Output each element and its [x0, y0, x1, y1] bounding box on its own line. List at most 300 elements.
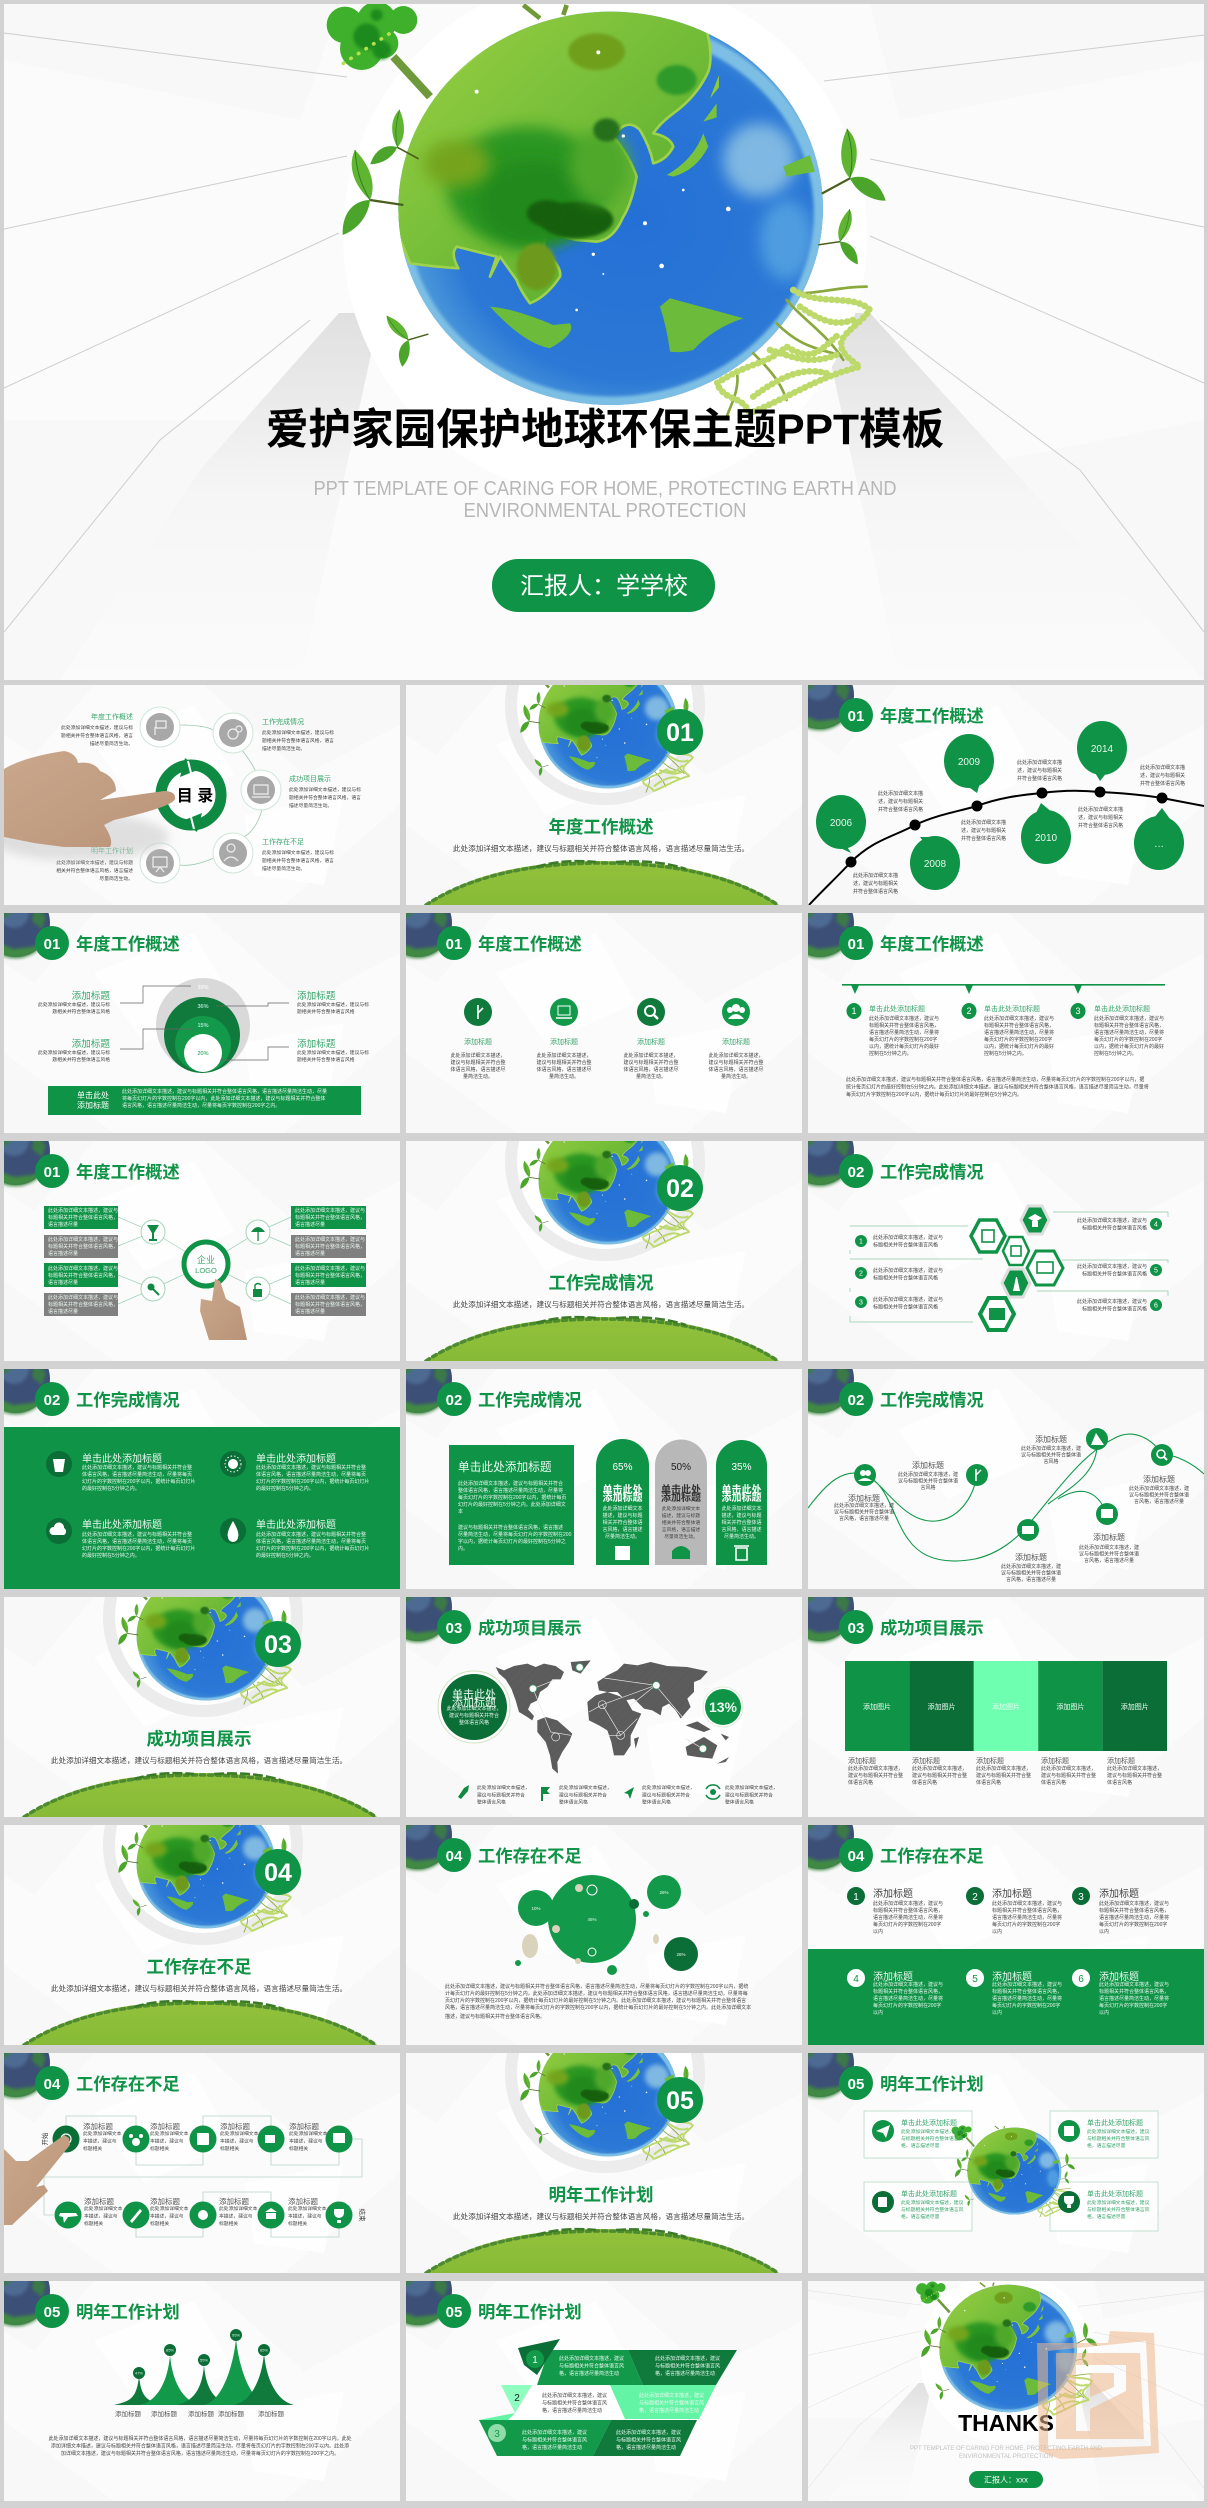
header: [786, 889, 984, 960]
13% badge: 13%: [709, 1699, 738, 1715]
right boxes: 此处添加详细文本描述，建议与: [295, 1294, 365, 1301]
card icons: [872, 2120, 1080, 2213]
text card: 每页幻灯片的字数控制在200字以内，据统计每页: [458, 1494, 566, 1501]
node labels: 此处添加详细文本描述，建: [1129, 1485, 1189, 1492]
section description: 此处添加详细文本描述，建议与标题相关并符合整体语言风格，语言描述尽量简洁生活。: [453, 843, 749, 853]
row 2 labels: 本描述，建议与: [219, 2212, 253, 2220]
section title: 明年工作计划: [548, 2185, 654, 2205]
header: 01: [44, 1164, 60, 1181]
ribbon band 1: 此处添加详细文本描述，建议: [655, 2355, 720, 2362]
header: [786, 661, 984, 732]
right list: 此处添加详细文本描述，建议与: [1077, 1298, 1147, 1305]
column captions: 建议与标题相关并符合整: [1107, 1772, 1162, 1779]
ribbon band 2: 格，语言描述尽量简洁生动: [639, 2407, 699, 2414]
hand pointing: [4, 2135, 70, 2225]
card text: 单击此处添加标题: [1087, 2118, 1143, 2127]
text card: 字以内，据统计每页幻灯片的最好控制在5分钟之: [458, 1538, 566, 1545]
row 2 labels: 本描述，建议与: [150, 2212, 184, 2220]
callouts: 添加标题: [297, 990, 336, 1002]
green summary bar: 单击此处: [77, 1090, 109, 1100]
items 4-6: 4: [853, 1974, 859, 1985]
bubbles: [515, 1875, 698, 1975]
bottom legend: 建议与标题相关并符合: [725, 1791, 773, 1798]
column captions: 添加标题: [1041, 1756, 1069, 1765]
row 1 labels: [83, 2121, 328, 2152]
right list: 此处添加详细文本描述，建议与: [1077, 1263, 1147, 1270]
contents text: 题相关并符合整体语言风格，语言: [61, 732, 133, 739]
right boxes: 标题相关并符合整体语言风格，: [295, 1214, 365, 1221]
subtitle: [314, 477, 896, 522]
row 1 labels: 标题相关: [289, 2145, 308, 2152]
panel: folded ribbon list: [406, 2281, 802, 2501]
card text: [901, 2118, 1150, 2220]
columns: 控制在5分钟之内。: [869, 1050, 912, 1057]
contents text: 描述尽量简洁生动。: [289, 802, 332, 809]
left boxes: 语言描述尽量: [48, 1221, 78, 1228]
right list: 4: [1154, 1222, 1158, 1228]
columns: 以内，据统计每页幻灯片的最好: [984, 1043, 1054, 1050]
column captions: 体语言风格: [848, 1779, 873, 1786]
node labels: 添加标题: [912, 1460, 944, 1470]
items 1-3: 语言描述尽量简洁生动，尽量将: [873, 1914, 943, 1921]
header: 02: [848, 1392, 864, 1409]
year bubbles: …: [1154, 839, 1164, 850]
illustration: earth: [916, 2282, 1097, 2416]
bottom legend: 建议与标题相关并符合: [559, 1791, 607, 1798]
node labels: 此处添加详细文本描述，建: [1001, 1563, 1061, 1570]
column captions: 添加标题: [848, 1756, 876, 1765]
header: [0, 2029, 180, 2100]
panel: section 01 divider: [406, 685, 802, 905]
right boxes: 语言描述尽量: [295, 1308, 325, 1315]
callouts: [38, 990, 369, 1063]
hand pointing: [0, 751, 175, 861]
section title: 年度工作概述: [548, 817, 654, 837]
panel: green band with four items: [4, 1369, 400, 1589]
green summary bar: 此处添加详细文本描述，建议与标题相关并符合整体语言风格，语言描述尽量简洁生动，尽量: [122, 1088, 327, 1095]
row 1 labels: 标题相关: [83, 2145, 102, 2152]
column text: 建议与标题相关并符合整: [450, 1059, 506, 1066]
column captions: 添加标题: [1107, 1756, 1135, 1765]
item text: 体语言风格，语言描述尽量简洁生动，尽量将每页: [256, 1471, 366, 1478]
contents text: 描述尽量简洁生动。: [90, 740, 133, 747]
left boxes: 标题相关并符合整体语言风格，: [48, 1272, 118, 1279]
columns: 此处添加详细文本描述，建议与: [984, 1015, 1054, 1022]
hand pointing up: [200, 1279, 247, 1340]
column captions: 建议与标题相关并符合整: [976, 1772, 1031, 1779]
contents text: 明年工作计划: [91, 846, 133, 855]
column captions: 此处添加详细文本描述，: [1107, 1765, 1162, 1772]
header: [384, 1573, 582, 1644]
items 4-6: 标题相关并符合整体语言风格，: [1099, 1988, 1169, 1995]
node labels: 添加标题: [1015, 1552, 1047, 1562]
column text: 此处添加详细文本描述，: [536, 1052, 592, 1059]
contents nodes: [140, 707, 281, 883]
items 1-3: 每页幻灯片的字数控制在200字: [992, 1921, 1060, 1928]
subtitle: ENVIRONMENTAL PROTECTION: [959, 2453, 1053, 2460]
arch 65%: 相关并符合整体语: [602, 1519, 643, 1526]
card text: 此处添加详细文本描述，建议: [901, 2128, 964, 2135]
illustration: watercolor earth with trees: [327, 2, 886, 417]
row 1 labels: 添加标题: [83, 2121, 113, 2131]
panel: concentric percent chart: [4, 913, 400, 1133]
green band: [4, 1427, 400, 1589]
node labels: 添加标题: [1035, 1434, 1067, 1444]
card text: 单击此处添加标题: [901, 2118, 957, 2127]
text card: 幻灯片的最好控制在5分钟之内。此处添加详细文: [458, 1501, 566, 1508]
items 4-6: 每页幻灯片的字数控制在200字: [1099, 2002, 1167, 2009]
right boxes: 标题相关并符合整体语言风格，: [295, 1243, 365, 1250]
text card: 此处添加详细文本描述，建议与标题相关并符合: [458, 1480, 563, 1487]
ribbon band 1: 与标题相关并符合整体语言风: [655, 2362, 720, 2370]
columns: 标题相关并符合整体语言风格，: [869, 1022, 939, 1029]
bottom legend: 整体语言风格: [477, 1799, 506, 1806]
column captions: 建议与标题相关并符合整: [1041, 1772, 1096, 1779]
header: [384, 2257, 582, 2328]
panel: three numbered columns: [808, 913, 1204, 1133]
arch 50%: 此处添加详细文本: [662, 1505, 700, 1512]
card text: 格，语言描述尽量: [901, 2213, 940, 2220]
right list: [1037, 1212, 1168, 1312]
left boxes: 此处添加详细文本描述，建议与: [48, 1236, 118, 1243]
section number: 01: [666, 719, 694, 747]
center logo ring: LOGO: [195, 1266, 217, 1275]
right boxes: 语言描述尽量: [295, 1221, 325, 1228]
card outlines: [864, 2111, 1158, 2231]
card text: 单击此处添加标题: [1087, 2189, 1143, 2198]
green summary bar: [48, 1086, 361, 1115]
arch 35%: 单击此处: [722, 1483, 762, 1496]
columns: 语言描述尽量简洁生动，尽量将: [1094, 1029, 1164, 1036]
arch 35%: 添加标题: [722, 1491, 762, 1504]
columns: 每页幻灯片的字数控制在200字: [1094, 1036, 1162, 1043]
contents text: 此处添加详细文本描述，建议与标: [61, 724, 133, 731]
card text: 格，语言描述尽量: [1087, 2142, 1126, 2149]
left list: 标题相关并符合整体语言风格: [873, 1242, 938, 1248]
subtitle: PPT TEMPLATE OF CARING FOR HOME, PROTECTING EARTH AND: [910, 2445, 1102, 2452]
items 4-6: 6: [1078, 1974, 1084, 1985]
paragraph: 描述，建议与标题相关并符合整体语言风格。: [445, 2013, 545, 2020]
column captions: 添加标题: [912, 1756, 940, 1765]
timeline notes: 述，建议与标题相关: [961, 827, 1006, 834]
color columns: 添加图片: [863, 1702, 891, 1711]
bubbles: 10%: [531, 1906, 541, 1911]
header: 04: [848, 1848, 865, 1865]
section description: 此处添加详细文本描述，建议与标题相关并符合整体语言风格，语言描述尽量简洁生活。: [51, 1983, 347, 1993]
header: [384, 1801, 582, 1872]
row 2 labels: 标题相关: [288, 2220, 307, 2227]
paragraph: 此处添加详细文本描述，建议与标题相关并符合整体语言风格，语言描述尽量简洁生动，尽量将每页幻灯片的字数控制在200字以内，据统: [445, 1983, 748, 1990]
card text: 此处添加详细文本描述，建议: [1087, 2199, 1150, 2206]
mountain peaks: 85%: [260, 2348, 268, 2352]
paragraph: 添加详细文本描述，建议与标题相关并符合整体语言风格，语言描述尽量简洁生动，尽量将每页幻灯片的字数控制在200字以内。此处添: [51, 2442, 349, 2450]
items 1-3: 添加标题: [992, 1887, 1032, 1900]
card text: 与标题相关并符合整体语言风: [901, 2135, 964, 2142]
ribbon band 2: 此处添加详细文本描述，建议: [542, 2392, 607, 2399]
items 1-3: 2: [972, 1892, 978, 1903]
panel: logo mind map: [4, 1141, 400, 1361]
small icon circles: [141, 1220, 270, 1301]
left list: 此处添加详细文本描述，建议与: [873, 1296, 943, 1303]
bottom legend: [458, 1784, 778, 1806]
node labels: 添加标题: [848, 1493, 880, 1503]
node labels: 言风格，语言描述尽量: [1084, 1557, 1134, 1564]
color columns: 添加图片: [928, 1702, 956, 1711]
header: 工作完成情况: [76, 1390, 180, 1410]
row 2 labels: 标题相关: [219, 2220, 238, 2227]
items 1-3: 标题相关并符合整体语言风格，: [873, 1907, 943, 1914]
start and end labels: 结束: [358, 2208, 367, 2222]
subtitle: ENVIRONMENTAL PROTECTION: [464, 499, 746, 522]
items 4-6: 添加标题: [992, 1970, 1032, 1983]
ribbon band 3: 格，语言描述尽量简洁生动: [616, 2444, 676, 2451]
13% badge: [703, 1687, 743, 1727]
columns: 单击此处添加标题: [984, 1004, 1040, 1013]
item text: 体语言风格，语言描述尽量简洁生动，尽量将每页: [82, 1538, 192, 1545]
row 2 labels: 添加标题: [219, 2196, 249, 2206]
header: [786, 1117, 984, 1188]
items 1-3: [847, 1887, 1169, 1935]
header: 年度工作概述: [880, 706, 984, 726]
timeline notes: 并符合整体语言风格: [878, 806, 923, 813]
bottom legend: 此处添加详细文本描述，: [559, 1784, 612, 1791]
header: 年度工作概述: [76, 1162, 180, 1182]
panel: world map: [406, 1597, 802, 1817]
timeline notes: 述，建议与标题相关: [1140, 772, 1185, 779]
column text: 此处添加详细文本描述，: [450, 1052, 506, 1059]
columns: 单击此处添加标题: [869, 1004, 925, 1013]
right list: 此处添加详细文本描述，建议与: [1077, 1217, 1147, 1224]
arch 35%: 35%: [731, 1462, 752, 1473]
thanks title: THANKS: [958, 2410, 1054, 2436]
ribbon band 2: 此处添加详细文本描述，建议: [639, 2392, 704, 2399]
items 1-3: 此处添加详细文本描述，建议与: [873, 1900, 943, 1907]
panel: text box and percent arches: [406, 1369, 802, 1589]
ribbon band 3: 与标题相关并符合整体语言风: [616, 2436, 681, 2444]
left list: 标题相关并符合整体语言风格: [873, 1304, 938, 1310]
arch 50%: 尽量简洁生动。: [664, 1533, 698, 1540]
section description: 此处添加详细文本描述，建议与标题相关并符合整体语言风格，语言描述尽量简洁生活。: [453, 1299, 749, 1309]
column text: 量简洁生动。: [721, 1073, 751, 1080]
section number: 04: [264, 1859, 292, 1887]
arch 35%: 言风格，语言描述: [721, 1526, 762, 1533]
right list: 5: [1154, 1268, 1158, 1274]
panel: section 05 divider: [406, 2053, 802, 2273]
right boxes: 语言描述尽量: [295, 1250, 325, 1257]
column captions: 体语言风格: [912, 1779, 937, 1786]
contents text: 描述尽量简洁生动。: [262, 865, 305, 872]
row 1 labels: 标题相关: [150, 2145, 169, 2152]
header: 工作存在不足: [880, 1846, 984, 1866]
section title: 工作存在不足: [146, 1957, 252, 1977]
arch 50%: 言风格，语言描述: [662, 1526, 700, 1533]
bottom paragraph: 每页幻灯片字数控制在200字以内，据统计每页幻灯片的最好控制在5分钟之内。: [846, 1091, 1022, 1098]
panel: five image columns: [808, 1597, 1204, 1817]
items 4-6: 此处添加详细文本描述，建议与: [873, 1981, 943, 1988]
panel: globe with four cards: [808, 2053, 1204, 2273]
peak labels: [115, 2409, 284, 2418]
peak labels: 添加标题: [115, 2409, 142, 2418]
left list: 此处添加详细文本描述，建议与: [873, 1267, 943, 1274]
contents text: 年度工作概述: [91, 712, 133, 721]
bottom legend: 整体语言风格: [642, 1799, 671, 1806]
node labels: [834, 1434, 1189, 1583]
process circles row 1: [52, 2126, 352, 2152]
header: 04: [44, 2076, 61, 2093]
column text: 量简洁生动。: [549, 1073, 579, 1080]
timeline notes: 此处添加详细文本描: [853, 872, 898, 879]
center logo ring: [184, 1242, 228, 1286]
center earth: [951, 2125, 1075, 2217]
arch 50%: [655, 1440, 707, 1565]
panel: hexagon list: [808, 1141, 1204, 1361]
item text: 单击此处添加标题: [82, 1518, 162, 1531]
column text: 添加标题: [464, 1037, 492, 1046]
connector lines: [118, 1217, 291, 1304]
panel: mountain chart: [4, 2281, 400, 2501]
contents text: 题相关并符合整体语言风格，语言: [289, 794, 361, 801]
items 1-3: 每页幻灯片的字数控制在200字: [1099, 1921, 1167, 1928]
item text: 此处添加详细文本描述，建议与标题相关并符合整: [256, 1464, 366, 1471]
arch 35%: 尽量简洁生动。: [724, 1533, 759, 1540]
row 1 labels: 标题相关: [220, 2145, 239, 2152]
timeline notes: 述，建议与标题相关: [1017, 767, 1062, 774]
node labels: 议与标题相关并符合整体语: [1129, 1492, 1189, 1498]
ribbon band 2: 格，语言描述尽量简洁生动: [542, 2407, 602, 2414]
item text: 此处添加详细文本描述，建议与标题相关并符合整: [82, 1531, 192, 1538]
header: 明年工作计划: [478, 2302, 582, 2322]
timeline curve: [809, 786, 1204, 905]
left boxes: 语言描述尽量: [48, 1250, 78, 1257]
row 2 labels: 此处添加详细文本: [84, 2205, 123, 2212]
card text: 与标题相关并符合整体语言风: [901, 2206, 964, 2213]
node labels: 议与标题相关并符合整体语: [834, 1508, 894, 1516]
column text: 添加标题: [637, 1037, 665, 1046]
arch 35%: 描述，建议与标题: [721, 1512, 762, 1519]
left callout circle: 建议与标题相关并符合: [449, 1712, 499, 1719]
column text: 量简洁生动。: [636, 1073, 666, 1080]
items 4-6: 此处添加详细文本描述，建议与: [1099, 1981, 1169, 1988]
arch 50%: 添加标题: [661, 1491, 701, 1504]
items 4-6: 5: [972, 1974, 978, 1985]
item text: 的最好控制在5分钟之内。: [256, 1552, 314, 1559]
columns: 以内，据统计每页幻灯片的最好: [1094, 1043, 1164, 1050]
node labels: 此处添加详细文本描述，建: [1021, 1445, 1081, 1452]
items 4-6: 以内: [873, 2009, 883, 2016]
callouts: 此处添加详细文本描述，建议与标: [297, 1001, 369, 1008]
header: 03: [848, 1620, 864, 1637]
arch 35%: 相关并符合整体语: [721, 1519, 762, 1526]
row 2 labels: 标题相关: [84, 2220, 103, 2227]
row 2 labels: 添加标题: [150, 2196, 180, 2206]
arch 65%: [596, 1439, 649, 1565]
header: [786, 1801, 984, 1872]
panel: timeline: [808, 685, 1204, 905]
right boxes: 此处添加详细文本描述，建议与: [295, 1236, 365, 1243]
contents text: 相关并符合整体语言风格，语言描述: [56, 867, 133, 874]
item text: 单击此处添加标题: [256, 1452, 336, 1465]
node labels: 添加标题: [1093, 1532, 1125, 1542]
header: [384, 889, 582, 960]
row 1 labels: 此处添加详细文本: [83, 2130, 122, 2137]
node labels: 言风格: [920, 1484, 936, 1491]
node labels: 言风格，语言描述尽量: [839, 1515, 889, 1522]
item text: 的最好控制在5分钟之内。: [256, 1485, 314, 1492]
callouts: 此处添加详细文本描述，建议与标: [38, 1001, 110, 1008]
row 2 labels: 此处添加详细文本: [288, 2205, 327, 2212]
header: 05: [446, 2304, 462, 2321]
timeline notes: 此处添加详细文本描: [878, 790, 923, 797]
section number: [657, 2077, 703, 2123]
column text: 体语言风格，语言描述尽: [708, 1066, 764, 1073]
header: 02: [446, 1392, 462, 1409]
text card: 单击此处添加标题: [458, 1460, 552, 1474]
contents text: 工作完成情况: [262, 717, 304, 726]
ribbon band 1: 与标题相关并符合整体语言风: [559, 2362, 624, 2370]
node labels: 言风格，语言描述尽量: [1006, 1576, 1056, 1583]
node labels: 添加标题: [1143, 1474, 1175, 1484]
process circles row 2: [54, 2202, 352, 2228]
left list: 此处添加详细文本描述，建议与: [873, 1234, 943, 1241]
header: 成功项目展示: [880, 1618, 984, 1638]
cycle arrows ring with 目录: [161, 758, 221, 832]
columns: 此处添加详细文本描述，建议与: [869, 1015, 939, 1022]
text card: 尽量简洁生动，尽量将每页幻灯片的字数控制在200: [458, 1531, 572, 1538]
green summary bar: 将每页幻灯片的字数控制在200字以内，此处添加详细文本描述，建议与标题相关并符合整体: [122, 1095, 325, 1102]
panel: serpentine process: [4, 2053, 400, 2273]
contents text: 此处添加详细文本描述，建议与标: [262, 729, 334, 736]
paragraph: 页幻灯片的字数控制在200字以内，据统计每页幻灯片的最好控制在5分钟之内。此处添加详细文本描述，建议与标题相关并符合整体语言: [445, 1997, 746, 2004]
columns: 每页幻灯片的字数控制在200字: [984, 1036, 1052, 1043]
header: [0, 1117, 180, 1188]
header: 工作存在不足: [478, 1846, 582, 1866]
items 1-3: 添加标题: [873, 1887, 913, 1900]
year bubbles: 2010: [1035, 833, 1058, 844]
node labels: 议与标题相关并符合整体语: [1079, 1550, 1139, 1558]
header: 01: [848, 708, 864, 725]
left list: 1: [859, 1238, 863, 1246]
panel: section 02 divider: [406, 1141, 802, 1361]
timeline notes: 此处添加详细文本描: [961, 819, 1006, 826]
columns: 控制在5分钟之内。: [984, 1050, 1027, 1057]
callouts: 题相关并符合整体语言风格: [297, 1008, 355, 1015]
timeline notes: 此处添加详细文本描: [1140, 764, 1185, 771]
section number: 03: [264, 1631, 292, 1659]
start and end labels: [40, 2132, 367, 2222]
row 1 labels: 添加标题: [150, 2121, 180, 2131]
callouts: 添加标题: [72, 1038, 110, 1050]
text card: [449, 1445, 574, 1565]
items 4-6: 添加标题: [873, 1970, 913, 1983]
panel: section 03 divider: [4, 1597, 400, 1817]
contents text: 此处添加详细文本描述，建议与标题: [56, 859, 133, 866]
bottom legend: 此处添加详细文本描述，: [477, 1784, 530, 1791]
header: 明年工作计划: [76, 2302, 180, 2322]
left callout circle: 单击此处: [452, 1688, 496, 1701]
panel: table of contents: [4, 685, 400, 905]
section number: 02: [666, 1175, 694, 1203]
item text: [82, 1452, 369, 1559]
ribbon band 3: 与标题相关并符合整体语言风: [522, 2436, 587, 2444]
left boxes: 标题相关并符合整体语言风格，: [48, 1214, 118, 1221]
right list: 标题相关并符合整体语言风格: [1082, 1270, 1147, 1278]
year bubbles: 2008: [924, 859, 947, 870]
left callout circle: 整体语言风格: [459, 1719, 489, 1726]
nested circles chart: 36%: [197, 1004, 209, 1010]
arch 65%: 65%: [612, 1462, 633, 1473]
ribbon band 2: 与标题相关并符合整体语言风: [542, 2400, 607, 2406]
row 1 labels: 添加标题: [289, 2121, 319, 2131]
